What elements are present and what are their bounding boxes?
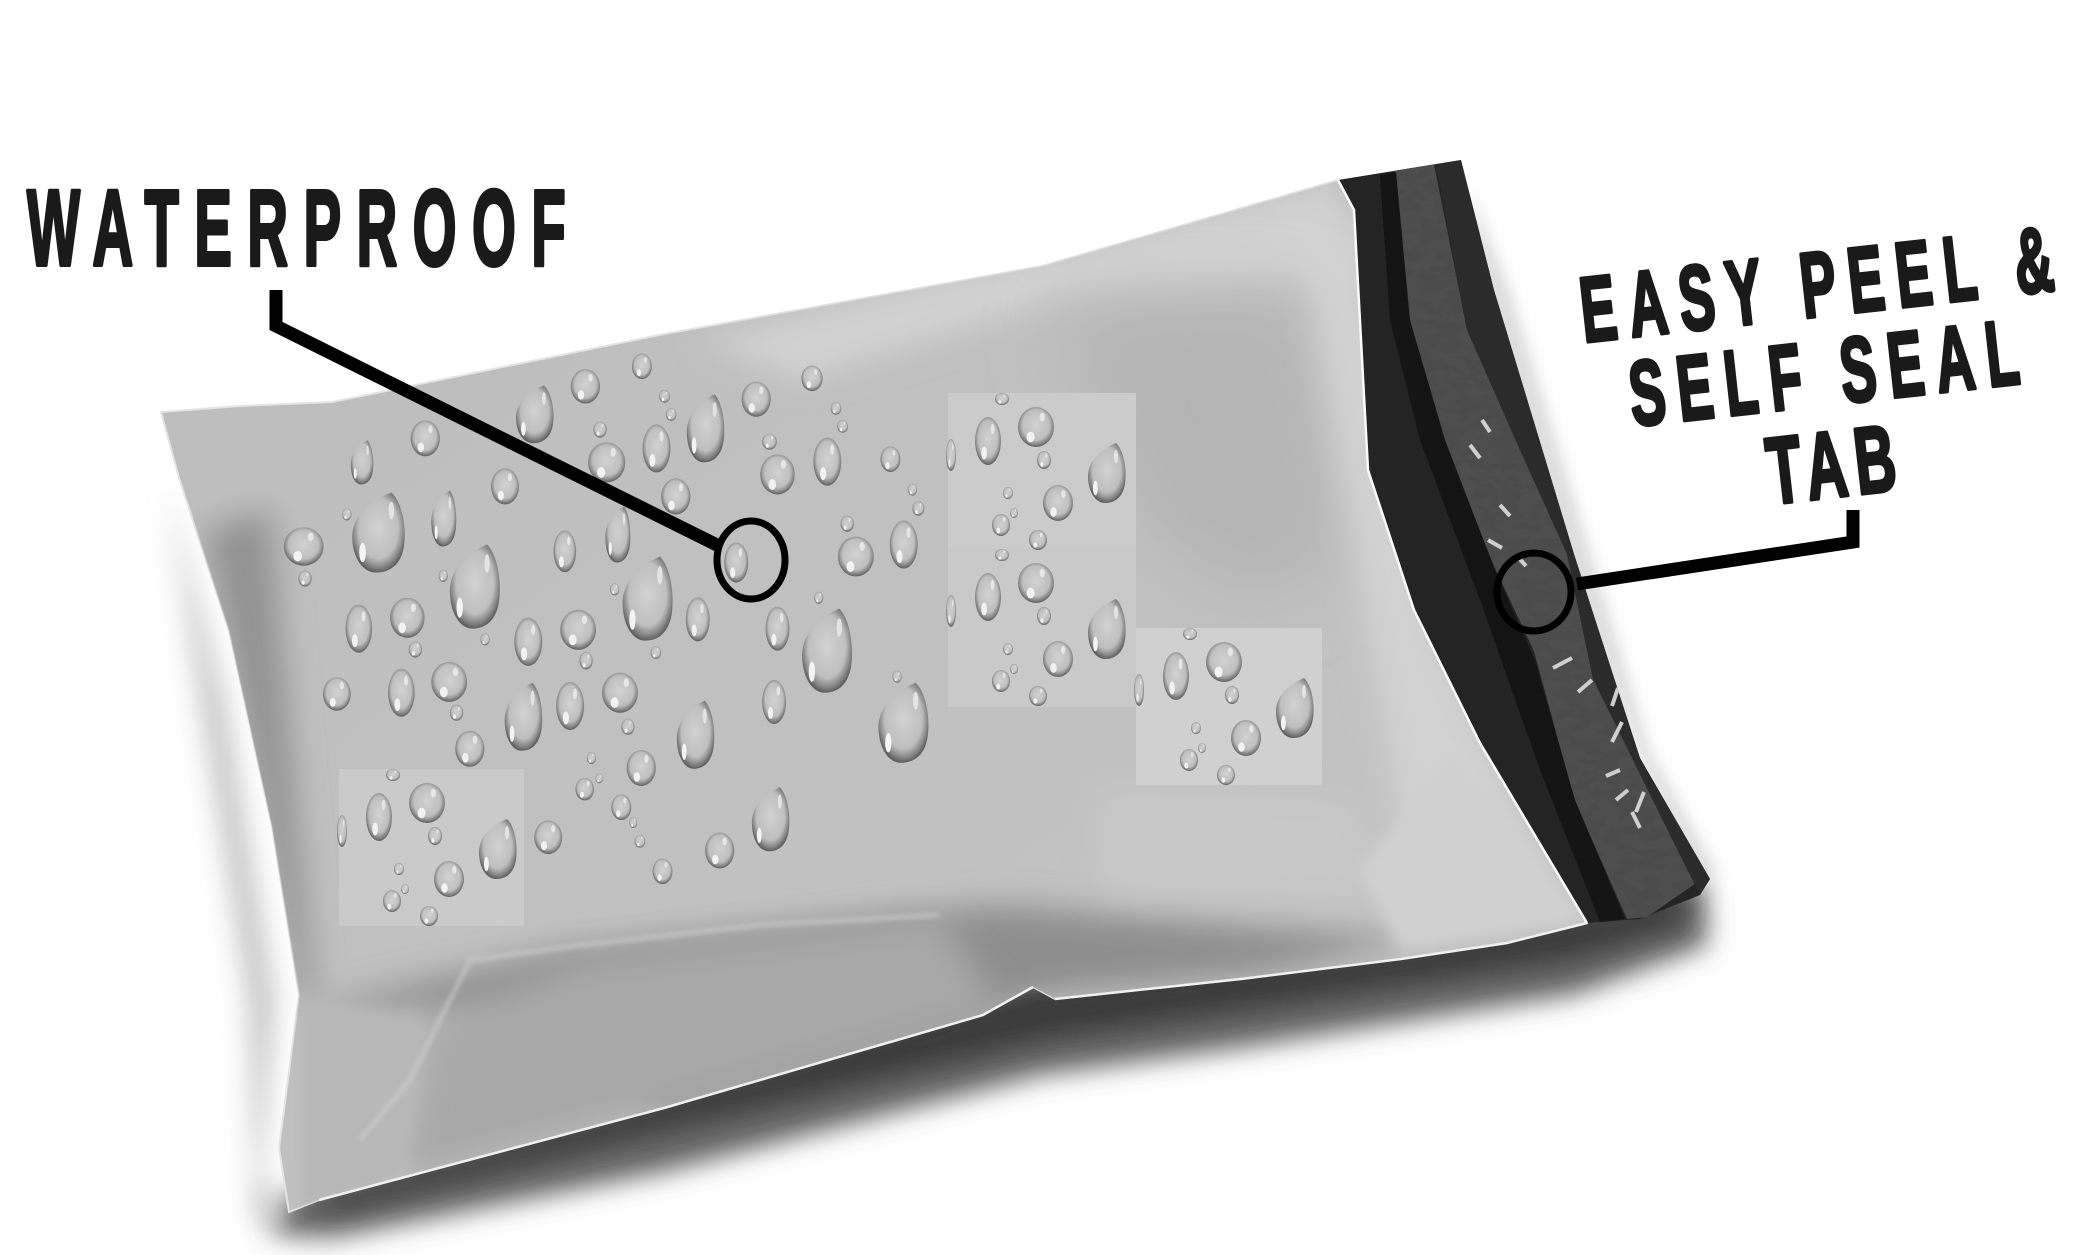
label: easy peel and self seal tab: EASY PEEL & [1575, 206, 2071, 361]
label: easy peel and self seal tab: TAB [1762, 405, 1909, 524]
leader line: seal tab [1497, 510, 1853, 631]
label: easy peel and self seal tab [1575, 206, 2071, 524]
water droplets [284, 353, 1314, 926]
mailer bag body [161, 180, 1587, 1212]
bag drop shadow [168, 190, 1716, 1238]
peel and seal tab [1338, 160, 1710, 923]
lighter water-drop patches [339, 393, 1322, 926]
label: waterproof: WATERPROOF [27, 168, 581, 289]
leader line: waterproof [276, 290, 785, 599]
label: easy peel and self seal tab: SELF SEAL [1624, 299, 2036, 445]
